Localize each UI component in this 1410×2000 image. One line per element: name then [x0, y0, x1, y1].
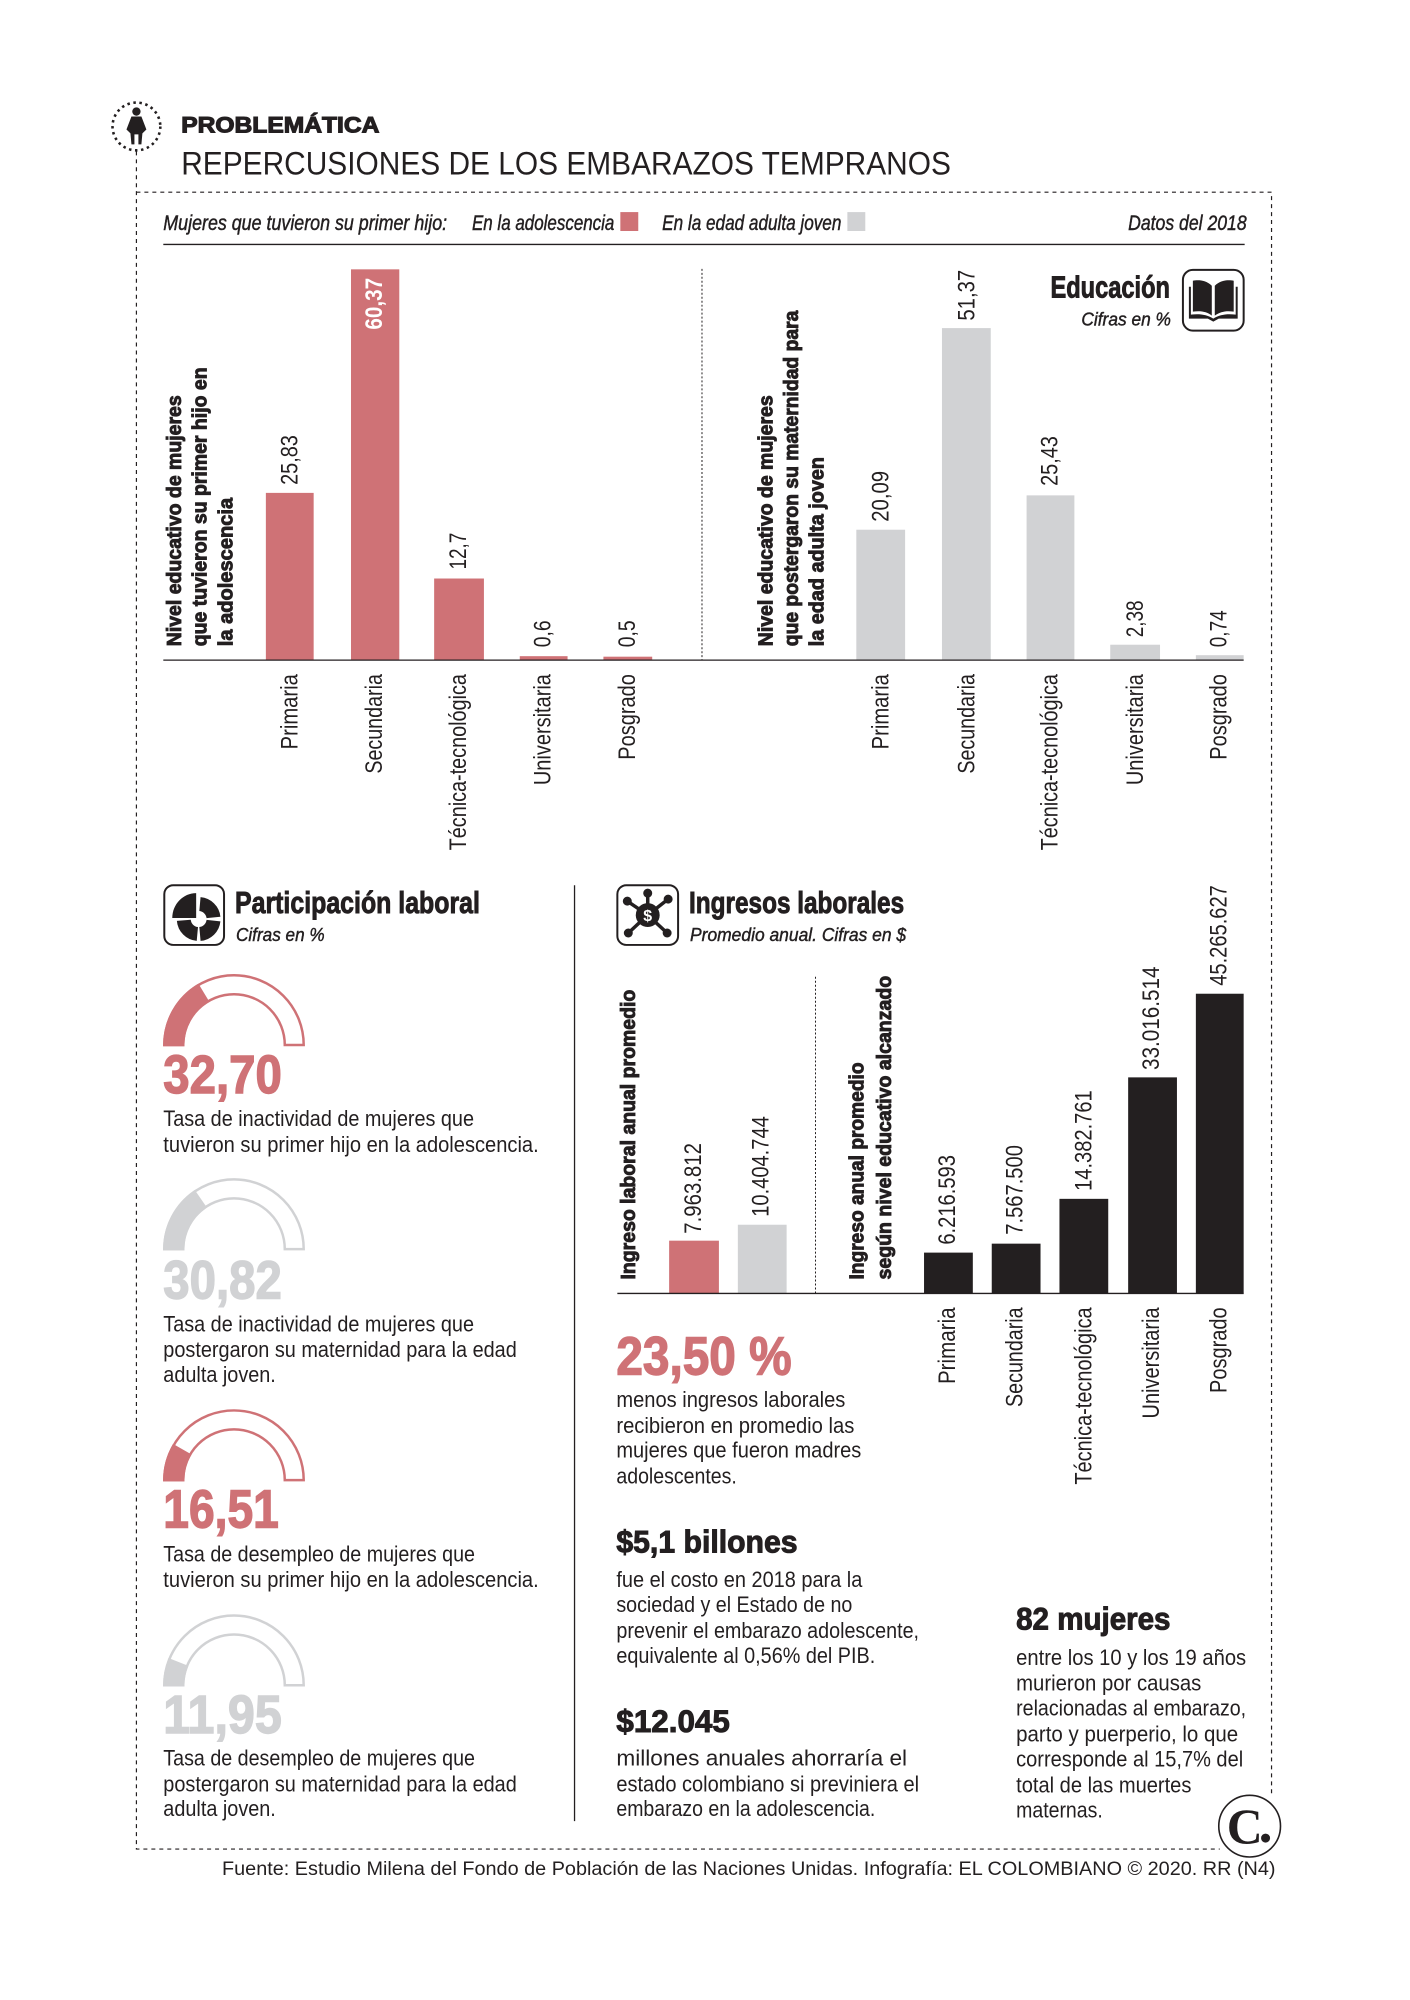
text: menos ingresos — [616, 1387, 861, 1489]
icon: money network: $ — [643, 908, 652, 925]
legend: En la edad adulta joven — [662, 212, 841, 235]
chart title: nivel educativo adulta joven — [756, 310, 828, 646]
value: 32,70: 32,70 — [163, 1045, 282, 1105]
bar chart: educación adulta joven: 20,09 — [868, 471, 895, 522]
heading: participación laboral: Participación laboral — [235, 885, 480, 920]
text: ahorro — [616, 1745, 919, 1821]
bar chart: educación adulta joven — [756, 270, 1244, 850]
stat: 82 mujeres: 82 mujeres — [1016, 1600, 1170, 1636]
text: costo: sociedad y el Estado de no — [616, 1592, 852, 1617]
title: REPERCUSIONES DE LOS EMBARAZOS TEMPRANOS — [181, 144, 951, 181]
panel: educación heading: Educación — [1050, 270, 1170, 305]
bar chart: ingreso según nivel educativo: 6.216.593 — [934, 1155, 961, 1245]
description: inactividad adulta joven — [163, 1311, 517, 1387]
value: 30,82: 30,82 — [163, 1250, 282, 1310]
value: 11,95: 11,95 — [163, 1685, 282, 1745]
chart title: nivel educativo adolescencia: Nivel educativo de mujeres — [164, 395, 186, 646]
bar chart: educación adulta joven: Técnica-tecnológica — [1036, 674, 1063, 850]
text: menos ingresos: recibieron en promedio las — [616, 1413, 854, 1438]
description: desempleo adulta joven: Tasa de desempleo de mujeres que — [163, 1745, 475, 1770]
source line: Fuente: Estudio Milena del Fondo de Población de las Naciones Unidas. Infografía: EL COLOMBIANO © 2020. RR (N4) — [222, 1858, 1276, 1880]
bar chart: ingreso según nivel educativo: Secundaria — [1002, 1307, 1029, 1407]
bar chart: ingreso según nivel educativo: 33.016.514 — [1138, 966, 1165, 1070]
bar chart: ingreso laboral anual promedio — [618, 990, 787, 1293]
heading: participación laboral — [235, 885, 480, 946]
bar chart: educación adolescencia: Primaria — [277, 674, 304, 749]
panel: educación heading: Cifras en % — [1081, 310, 1171, 331]
icon: money network — [617, 885, 678, 945]
description: inactividad adolescencia: Tasa de inactividad de mujeres que — [163, 1106, 474, 1131]
description: inactividad adulta joven: adulta joven. — [163, 1362, 276, 1387]
text: muertes maternas — [1016, 1645, 1246, 1823]
bar chart: educación adolescencia — [164, 269, 652, 850]
chart title: ingreso según nivel — [846, 976, 896, 1279]
chart title: nivel educativo adolescencia: que tuvieron su primer hijo en — [190, 367, 212, 646]
bar chart: ingreso según nivel educativo: Primaria — [934, 1307, 961, 1384]
bar chart: ingreso según nivel educativo — [846, 885, 1244, 1485]
bar chart: educación adulta joven: Primaria — [868, 674, 895, 749]
description: inactividad adolescencia — [163, 1106, 539, 1157]
legend: Datos del 2018 — [1128, 212, 1247, 235]
text: menos ingresos: menos ingresos laborales — [616, 1387, 845, 1412]
bar chart: educación adolescencia: 0,5 — [614, 620, 641, 647]
text: costo — [616, 1567, 919, 1668]
description: inactividad adolescencia: tuvieron su primer hijo en la adolescencia. — [163, 1132, 539, 1157]
bar chart: educación adulta joven: 51,37 — [953, 270, 980, 321]
logo: El Colombiano — [1219, 1795, 1281, 1857]
bar chart: ingreso según nivel educativo: 14.382.761 — [1070, 1090, 1097, 1191]
bar chart: ingreso según nivel educativo: 45.265.627 — [1206, 885, 1233, 986]
text: ahorro: embarazo en la adolescencia. — [616, 1796, 875, 1821]
heading: participación laboral: Cifras en % — [236, 925, 325, 946]
chart title: nivel educativo adulta joven: que postergaron su maternidad para — [781, 310, 803, 646]
bar chart: educación adulta joven: 0,74 — [1206, 610, 1233, 647]
text: muertes maternas: corresponde al 15,7% del — [1016, 1746, 1243, 1771]
bar chart: educación adulta joven: Posgrado — [1206, 674, 1233, 760]
bar chart: ingreso laboral anual promedio: 7.963.812 — [680, 1143, 707, 1234]
heading: problemática: PROBLEMÁTICA — [181, 112, 380, 137]
text: ahorro: estado colombiano si previniera el — [616, 1771, 919, 1796]
legend: Mujeres que tuvieron su primer hijo: — [163, 212, 447, 235]
text: muertes maternas: relacionadas al embarazo, — [1016, 1696, 1246, 1721]
description: inactividad adulta joven: Tasa de inactividad de mujeres que — [163, 1311, 474, 1336]
description: desempleo adolescencia: tuvieron su primer hijo en la adolescencia. — [163, 1567, 539, 1592]
bar chart: educación adulta joven: 25,43 — [1036, 436, 1063, 486]
gauge: 16,51 desempleo adolescencia — [164, 1410, 304, 1480]
stat: 23,50 %: 23,50 % — [616, 1327, 792, 1387]
bar chart: ingreso según nivel educativo: 7.567.500 — [1002, 1145, 1029, 1235]
bar chart: educación adolescencia: Secundaria — [361, 674, 388, 774]
legend — [163, 212, 1247, 235]
chart title: ingreso según nivel: Ingreso anual promedio — [846, 1062, 868, 1279]
gauge: 32,70 inactividad adolescencia — [164, 975, 304, 1045]
bar chart: educación adulta joven: 2,38 — [1122, 600, 1149, 637]
text: muertes maternas: total de las muertes — [1016, 1772, 1191, 1797]
description: desempleo adulta joven: postergaron su maternidad para la edad — [163, 1771, 517, 1796]
description: desempleo adulta joven: adulta joven. — [163, 1796, 276, 1821]
bar chart: educación adolescencia: 25,83 — [277, 435, 304, 485]
bar chart: educación adolescencia: Posgrado — [614, 674, 641, 760]
stat: $12.045: $12.045 — [616, 1703, 730, 1739]
text: ahorro: millones anuales ahorraría el — [616, 1745, 907, 1770]
description: inactividad adulta joven: postergaron su maternidad para la edad — [163, 1337, 517, 1362]
text: muertes maternas: parto y puerperio, lo que — [1016, 1722, 1238, 1747]
heading: ingresos laborales — [689, 885, 907, 946]
logo: El Colombiano: C — [1227, 1799, 1263, 1854]
heading: ingresos laborales: Ingresos laborales — [689, 885, 904, 920]
bar chart: ingreso laboral anual promedio: 10.404.744 — [748, 1116, 775, 1217]
icon: woman in dotted circle — [113, 103, 160, 150]
dashed frame — [136, 151, 1272, 1849]
icon: book — [1183, 270, 1244, 331]
chart title: nivel educativo adulta joven: Nivel educativo de mujeres — [756, 395, 778, 646]
description: desempleo adolescencia: Tasa de desempleo de mujeres que — [163, 1541, 475, 1566]
bar chart: educación adolescencia: 12,7 — [445, 533, 472, 570]
bar chart: ingreso según nivel educativo: Técnica-tecnológica — [1070, 1307, 1097, 1485]
icon: pie chart — [164, 885, 224, 945]
text: menos ingresos: mujeres que fueron madres — [616, 1438, 861, 1463]
chart title: nivel educativo adulta joven: la edad adulta joven — [806, 457, 828, 646]
bar chart: educación adolescencia: Universitaria — [530, 674, 557, 785]
bar chart: educación adolescencia: 0,6 — [530, 620, 557, 647]
bar chart: educación adulta joven: Universitaria — [1122, 674, 1149, 785]
text: menos ingresos: adolescentes. — [616, 1464, 737, 1489]
bar chart: educación adolescencia: Técnica-tecnológica — [445, 674, 472, 850]
bar chart: ingreso según nivel educativo: Posgrado — [1206, 1307, 1233, 1393]
text: muertes maternas: maternas. — [1016, 1798, 1103, 1823]
heading: ingresos laborales: Promedio anual. Cifras en $ — [690, 925, 907, 946]
text: muertes maternas: entre los 10 y los 19 años — [1016, 1645, 1246, 1670]
text: costo: equivalente al 0,56% del PIB. — [616, 1643, 875, 1668]
description: desempleo adulta joven — [163, 1745, 517, 1821]
text: costo: prevenir el embarazo adolescente, — [616, 1618, 919, 1643]
text: muertes maternas: murieron por causas — [1016, 1671, 1201, 1696]
chart title: nivel educativo adolescencia: la adolescencia — [216, 497, 238, 646]
chart title: ingreso según nivel: según nivel educativo alcanzado — [874, 976, 896, 1279]
bar chart: educación adulta joven: Secundaria — [953, 674, 980, 774]
panel: educación heading — [1050, 270, 1171, 331]
gauge: 30,82 inactividad adulta joven — [164, 1179, 304, 1249]
stat: $5,1 billones: $5,1 billones — [616, 1523, 798, 1559]
bar chart: educación adolescencia: 60,37 — [361, 278, 388, 330]
value: 16,51: 16,51 — [163, 1479, 279, 1539]
legend: En la adolescencia — [472, 212, 614, 235]
bar chart: ingreso laboral anual promedio: Ingreso laboral anual promedio — [618, 990, 640, 1279]
chart title: nivel educativo adolescencia — [164, 367, 238, 646]
description: desempleo adolescencia — [163, 1541, 539, 1592]
text: costo: fue el costo en 2018 para la — [616, 1567, 863, 1592]
bar chart: ingreso según nivel educativo: Universitaria — [1138, 1307, 1165, 1419]
gauge: 11,95 desempleo adulta joven — [164, 1616, 304, 1685]
